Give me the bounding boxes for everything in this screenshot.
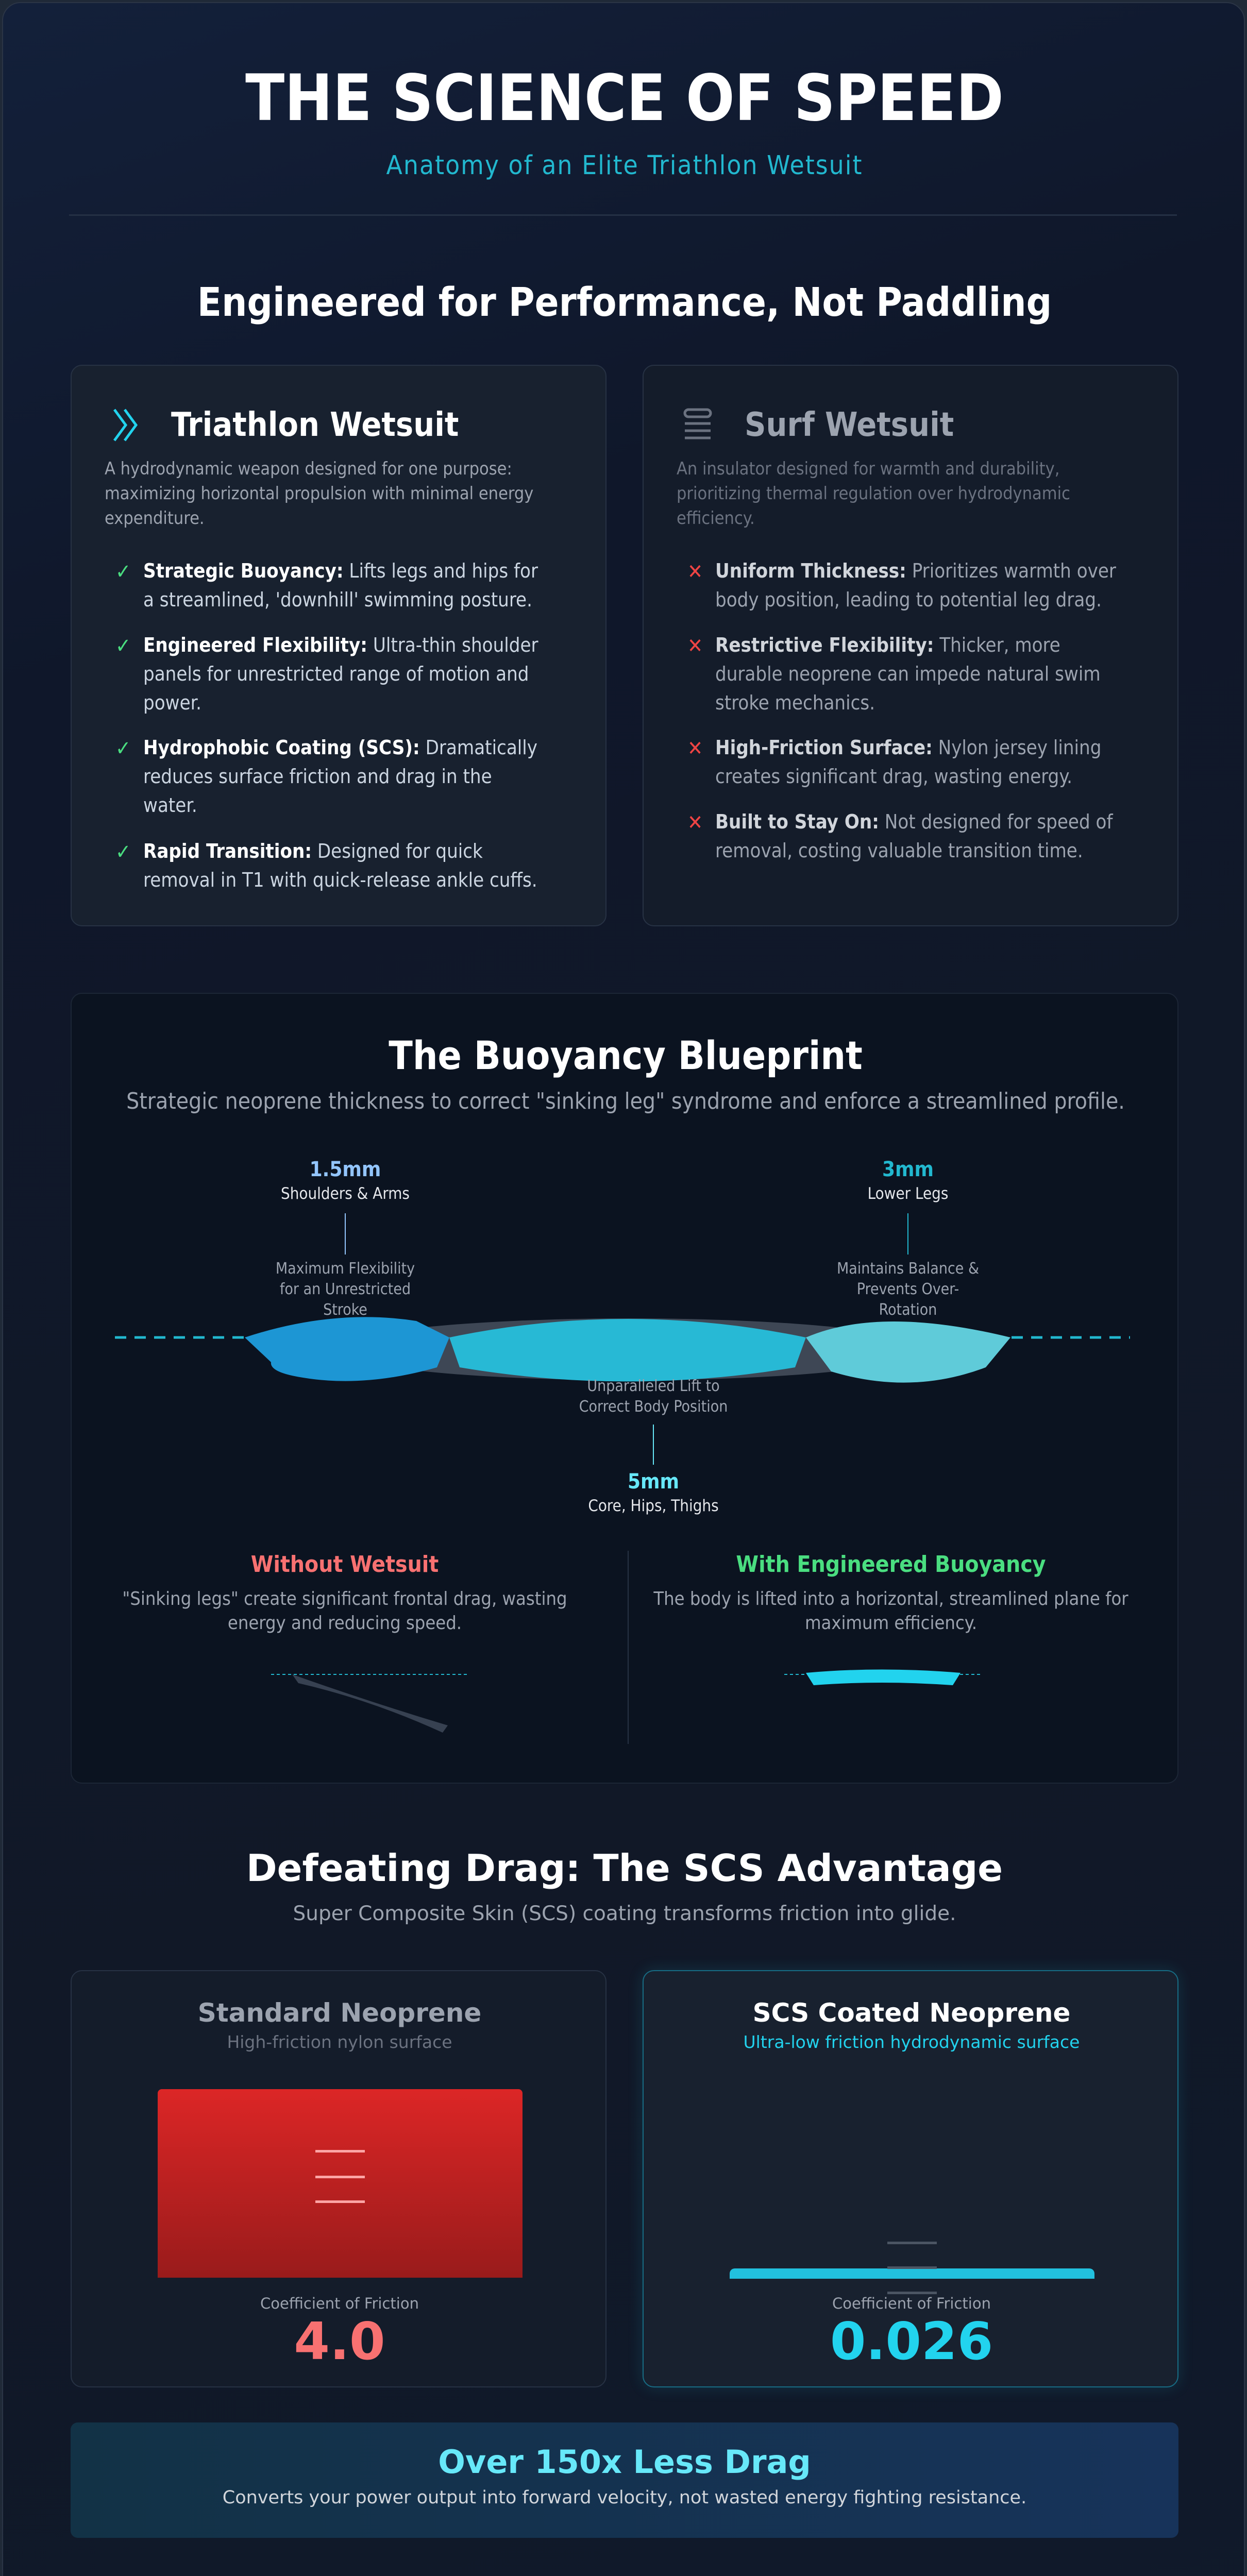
text block	[677, 459, 1070, 529]
item: Built to Stay On: Not designed for speed of	[715, 810, 1113, 833]
item: durable neoprene can impede natural swim	[715, 663, 1101, 685]
panel: triathlon wetsuit	[71, 365, 606, 926]
item: body position, leading to potential leg drag.	[715, 588, 1102, 611]
text block: efficiency.	[677, 508, 755, 529]
banner: 150x less drag: Over 150x Less Drag	[438, 2443, 811, 2481]
panel: surf wetsuit	[643, 365, 1178, 926]
callout: 3mm: Maintains Balance &	[837, 1260, 979, 1278]
item	[687, 810, 1113, 862]
comparison: with buoyancy: The body is lifted into a horizontal, streamlined plane for	[653, 1588, 1128, 1609]
panel: triathlon wetsuit: ✓	[115, 840, 131, 864]
callout: 5mm: Core, Hips, Thighs	[588, 1497, 719, 1515]
item: Strategic Buoyancy: Lifts legs and hips for	[143, 560, 538, 582]
comparison: with buoyancy: maximum efficiency.	[805, 1613, 977, 1634]
heading: surf: Surf Wetsuit	[745, 406, 954, 444]
callout: 3mm: Prevents Over-	[857, 1280, 959, 1298]
item	[687, 736, 1101, 788]
panel: standard neoprene: Coefficient of Friction	[260, 2295, 419, 2312]
heading: defeating drag: Defeating Drag: The SCS Advantage	[246, 1846, 1003, 1890]
text block: An insulator designed for warmth and durability,	[677, 459, 1059, 479]
item: creates significant drag, wasting energy.	[715, 765, 1072, 788]
callout: 5mm	[579, 1377, 728, 1515]
comparison: with buoyancy	[653, 1551, 1128, 1634]
banner: 150x less drag: Converts your power output into forward velocity, not wasted energy fighting resistance.	[223, 2487, 1026, 2508]
item: Uniform Thickness: Prioritizes warmth over	[715, 560, 1116, 582]
panel: surf wetsuit: ✕	[687, 811, 703, 835]
panel: standard neoprene: High-friction nylon surface	[227, 2032, 452, 2052]
item: Hydrophobic Coating (SCS): Dramatically	[143, 736, 537, 759]
item	[115, 634, 538, 714]
item	[115, 560, 538, 611]
item: Rapid Transition: Designed for quick	[143, 840, 483, 862]
callout: 5mm: Unparalleled Lift to	[587, 1377, 720, 1395]
item	[115, 736, 537, 817]
diagram: streamlined	[784, 1669, 980, 1685]
panel: surf wetsuit: ✕	[687, 634, 703, 658]
panel: standard neoprene: Standard Neoprene	[198, 1998, 481, 2028]
chart: friction block	[158, 2089, 523, 2278]
item: a streamlined, 'downhill' swimming posture.	[143, 588, 532, 611]
panel: surf wetsuit: ✕	[687, 560, 703, 584]
item: water.	[143, 794, 197, 817]
subtitle: Anatomy of an Elite Triathlon Wetsuit	[386, 150, 863, 181]
callout: 3mm	[837, 1158, 979, 1319]
icon: stack	[683, 408, 712, 439]
text block: prioritizing thermal regulation over hydrodynamic	[677, 483, 1070, 504]
heading: engineered: Engineered for Performance, Not Paddling	[197, 280, 1052, 326]
banner: 150x less drag	[71, 2422, 1178, 2538]
icon: chevrons	[113, 409, 138, 441]
comparison: without wetsuit: "Sinking legs" create significant frontal drag, wasting	[122, 1588, 567, 1609]
panel: triathlon wetsuit: ✓	[115, 560, 131, 584]
panel: scs coated: SCS Coated Neoprene	[753, 1998, 1070, 2028]
item	[687, 560, 1116, 611]
item: stroke mechanics.	[715, 691, 875, 714]
panel: triathlon wetsuit: ✓	[115, 634, 131, 658]
text block	[105, 459, 533, 529]
item: reduces surface friction and drag in the	[143, 765, 492, 788]
text block: maximizing horizontal propulsion with minimal energy	[105, 483, 533, 504]
title: THE SCIENCE OF SPEED	[245, 61, 1004, 135]
callout: 1.5mm: Stroke	[323, 1301, 367, 1319]
callout: 1.5mm: for an Unrestricted	[280, 1280, 411, 1298]
callout: 5mm: 5mm	[628, 1470, 679, 1494]
callout: 1.5mm: Shoulders & Arms	[281, 1184, 410, 1203]
heading: The Buoyancy Blueprint	[389, 1032, 863, 1078]
chart: friction bar	[730, 2268, 1094, 2279]
item: Engineered Flexibility: Ultra-thin shoulder	[143, 634, 538, 656]
callout: 1.5mm	[276, 1158, 415, 1319]
comparison: without wetsuit: Without Wetsuit	[251, 1551, 439, 1578]
diagram: body profile	[115, 1317, 1130, 1383]
item	[115, 840, 537, 891]
callout: 3mm: Rotation	[879, 1301, 937, 1319]
callout: 3mm: 3mm	[882, 1158, 934, 1181]
callout: 3mm: Lower Legs	[868, 1184, 948, 1203]
panel: triathlon wetsuit: ✓	[115, 737, 131, 760]
item: removal, costing valuable transition time.	[715, 839, 1083, 862]
panel: surf wetsuit: ✕	[687, 737, 703, 760]
item	[687, 634, 1101, 714]
item: High-Friction Surface: Nylon jersey lining	[715, 736, 1101, 759]
item: removal in T1 with quick-release ankle cuffs.	[143, 869, 537, 891]
panel: scs coated	[643, 1970, 1178, 2387]
panel: standard neoprene	[71, 1970, 606, 2387]
text block: expenditure.	[105, 508, 205, 529]
heading: triathlon: Triathlon Wetsuit	[171, 406, 459, 444]
subtitle: Strategic neoprene thickness to correct "sinking leg" syndrome and enforce a streamlined profile.	[126, 1088, 1125, 1114]
callout: 1.5mm: Maximum Flexibility	[276, 1260, 415, 1278]
value: 4.0	[294, 2311, 385, 2371]
callout: 1.5mm: 1.5mm	[310, 1158, 381, 1181]
panel: scs coated: Coefficient of Friction	[832, 2295, 991, 2312]
value: 0.026	[830, 2311, 993, 2371]
panel: scs coated: Ultra-low friction hydrodynamic surface	[744, 2032, 1080, 2052]
comparison: without wetsuit: energy and reducing speed.	[228, 1613, 462, 1634]
comparison: with buoyancy: With Engineered Buoyancy	[736, 1551, 1046, 1578]
diagram: sinking legs	[271, 1674, 467, 1733]
panel: buoyancy blueprint	[71, 993, 1178, 1784]
comparison: without wetsuit	[122, 1551, 567, 1634]
subtitle: Super Composite Skin (SCS) coating transforms friction into glide.	[293, 1902, 956, 1925]
item: power.	[143, 691, 201, 714]
item: panels for unrestricted range of motion and	[143, 663, 529, 685]
item: Restrictive Flexibility: Thicker, more	[715, 634, 1060, 656]
callout: 5mm: Correct Body Position	[579, 1398, 728, 1416]
text block: A hydrodynamic weapon designed for one purpose:	[105, 459, 512, 479]
